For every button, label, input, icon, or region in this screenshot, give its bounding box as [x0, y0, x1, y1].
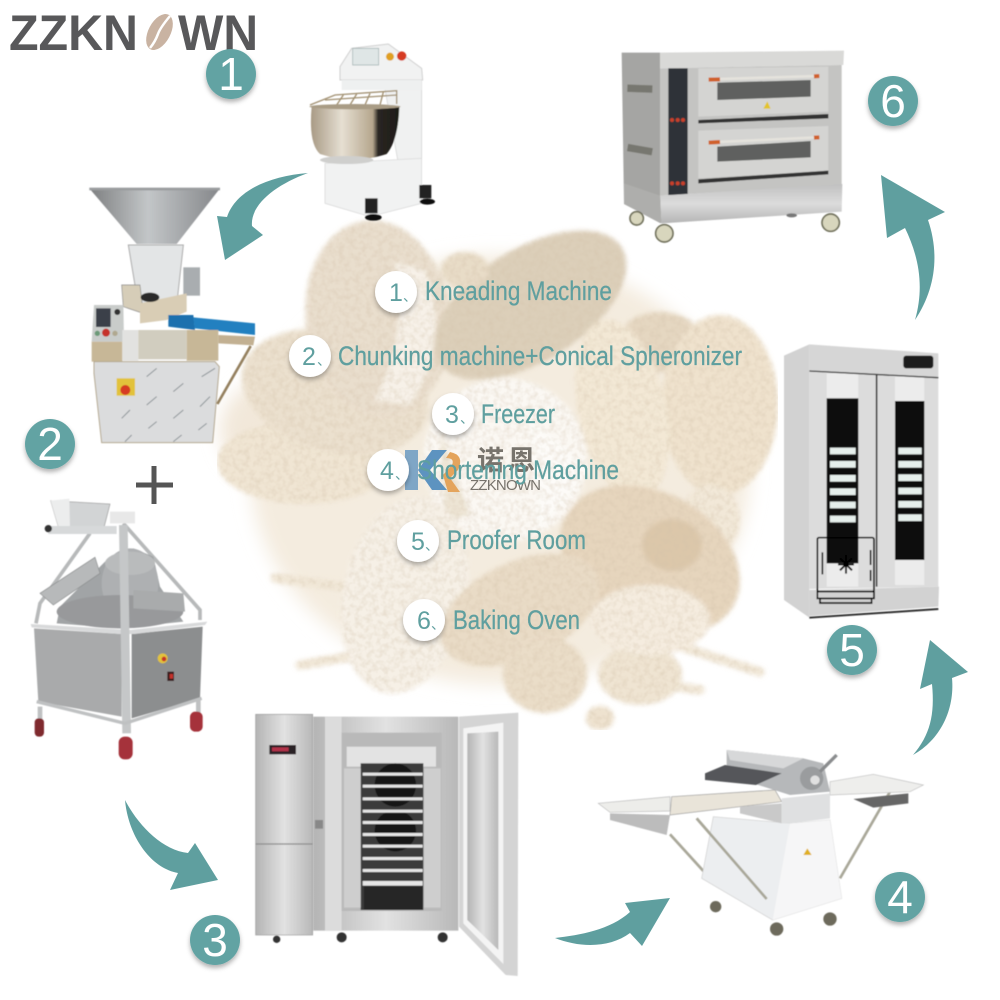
lower sesame loaves	[534, 455, 766, 665]
machine 2b: conical spheronizer	[31, 499, 207, 759]
list item 4: 4	[380, 457, 394, 485]
watermark logo: ZZKNOWN	[470, 477, 541, 494]
list item 4: Shortening Machine	[417, 455, 619, 485]
badge 1	[206, 48, 256, 100]
logo: ZZKNOWN	[9, 5, 258, 61]
list item 3: 、	[460, 410, 474, 426]
logo: ZZKNOWN: ZZKN	[9, 5, 138, 61]
list item 1: 、	[403, 288, 417, 304]
watermark logo: 诺恩	[477, 446, 535, 476]
arrow: step 1 to 2	[217, 173, 308, 260]
list item 2: 2	[302, 343, 316, 371]
list item 6: Baking Oven	[453, 605, 580, 635]
basket	[217, 420, 393, 504]
badge 3	[190, 914, 240, 966]
machine 4: shortening machine	[598, 750, 923, 936]
logo: ZZKNOWN: WN	[178, 5, 258, 61]
list item 4	[367, 449, 619, 491]
list item 2: Chunking machine+Conical Spheronizer	[338, 341, 742, 371]
machine 6: baking oven	[622, 51, 844, 242]
plus sign	[136, 466, 173, 504]
list item 3	[432, 393, 555, 435]
badge 6: 6	[880, 75, 906, 127]
list item 1	[375, 271, 612, 313]
freezer icon overlay	[817, 538, 874, 603]
background: faded bread basket photo	[217, 200, 778, 730]
machine 3: freezer	[256, 713, 518, 976]
sesame loaf left	[228, 309, 442, 475]
arrow: step 4 to 5	[913, 640, 968, 755]
wheat stalks	[275, 578, 760, 690]
list item 1: 1	[389, 279, 403, 307]
list item 5: 、	[425, 537, 439, 553]
badge 5: 5	[839, 624, 865, 676]
badge 5	[827, 624, 877, 676]
badge 4	[875, 871, 925, 923]
badge 6	[868, 75, 918, 127]
badge 1: 1	[218, 48, 244, 100]
machine 2a: chunking machine	[89, 188, 255, 443]
list item 6: 、	[431, 616, 445, 632]
arrow: step 5 to 6	[881, 175, 945, 320]
machine 1: kneading machine	[309, 44, 435, 221]
list item 6	[403, 599, 580, 641]
right loaves	[618, 312, 702, 372]
list item 3: 3	[445, 401, 459, 429]
list item 5: Proofer Room	[447, 525, 586, 555]
badge 3: 3	[202, 914, 228, 966]
badge 2: 2	[37, 418, 63, 470]
seeded loaf	[409, 200, 651, 410]
large loaf top left	[293, 211, 463, 425]
machine 5: proofer room	[784, 344, 939, 618]
list item 1: Kneading Machine	[425, 276, 612, 306]
arrow: step 2 to 3	[125, 800, 218, 890]
list item 3: Freezer	[481, 399, 555, 429]
list item 2: 、	[317, 352, 331, 368]
list item 5	[397, 520, 586, 562]
watermark logo	[405, 446, 541, 494]
step list	[289, 271, 742, 641]
list item 4: 、	[395, 466, 409, 482]
icon: coffee bean	[141, 10, 178, 54]
white flour loaf centre	[423, 378, 587, 542]
list item 6: 6	[417, 607, 431, 635]
list item 2	[289, 335, 742, 377]
lower left loaf	[324, 484, 486, 706]
badge 2	[25, 418, 75, 470]
badge 4: 4	[887, 871, 913, 923]
list item 5: 5	[411, 528, 425, 556]
arrow: step 3 to 4	[555, 898, 670, 946]
